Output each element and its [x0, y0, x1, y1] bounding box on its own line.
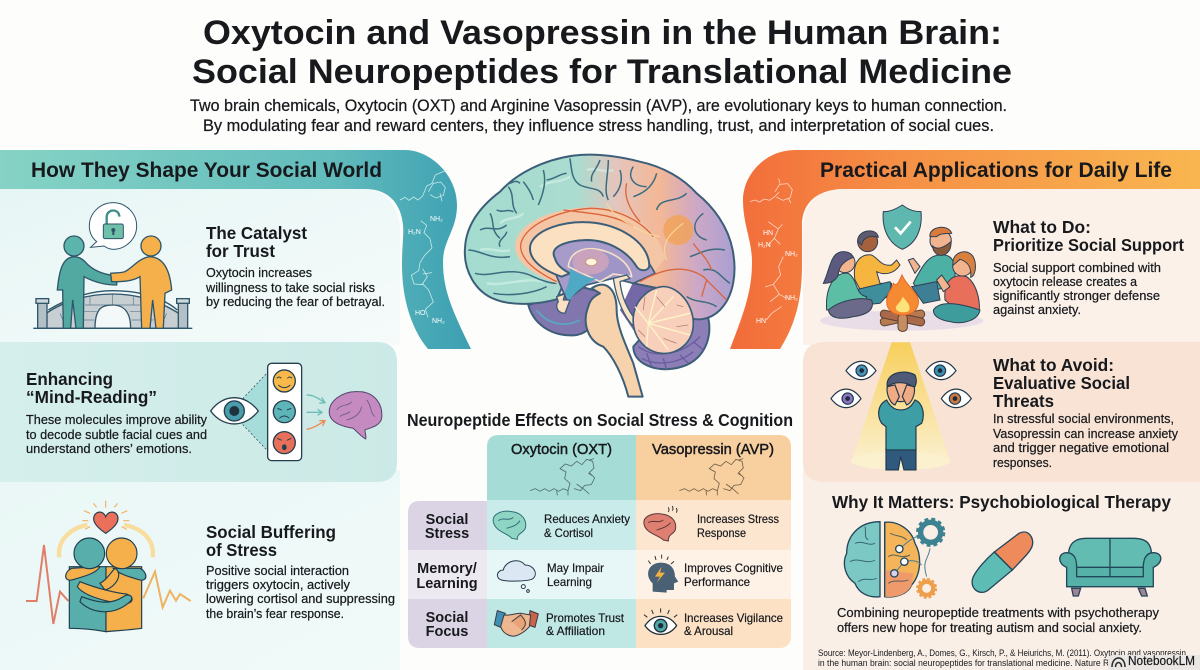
icon: handshake	[494, 611, 538, 636]
subtitle: By modulating fear and reward centers, they influence stress handling, trust, and interpretation of social cues.	[203, 116, 994, 135]
text block: social buffering: triggers oxytocin, actively	[206, 577, 350, 592]
row header column: Social	[426, 512, 468, 528]
text block: what to avoid: and trigger negative emotional	[993, 440, 1169, 455]
text block: what to avoid: Threats	[993, 391, 1054, 411]
panel: what to do	[803, 189, 1200, 345]
icon: capsule	[972, 532, 1033, 592]
panel: why it matters background	[803, 470, 1200, 670]
text block: social buffering: Positive social interaction	[206, 563, 349, 578]
text block: social buffering	[206, 522, 395, 621]
panel: left teal header ribbon: NH₂	[432, 318, 445, 325]
text block: social buffering: lowering cortisol and suppressing	[206, 591, 395, 606]
vasopressin column cells: Response	[697, 526, 746, 540]
text block: mind-reading: These molecules improve ability	[26, 412, 207, 427]
icon: eye reading facial expressions into brain	[211, 363, 382, 461]
heading: why it matters: Why It Matters: Psychobiological Therapy	[832, 492, 1171, 512]
source citation: in the human brain: social neuropeptides for translational medicine. Nature Re	[818, 658, 1114, 669]
text block: catalyst for trust: for Trust	[206, 241, 275, 261]
panel: left teal header ribbon	[0, 150, 471, 349]
panel: left teal header ribbon: H₂N	[408, 229, 421, 236]
oxytocin column cells	[487, 500, 636, 648]
text block: social buffering: of Stress	[206, 540, 277, 560]
row header column: Learning	[416, 576, 478, 592]
icon: calm brain	[493, 511, 526, 539]
icon: stressed person watched by eyes	[831, 342, 971, 470]
vasopressin column cells: Performance	[684, 575, 750, 589]
text block: mind-reading: to decode subtle facial cues and	[26, 427, 207, 442]
panel: what to avoid	[803, 342, 1200, 482]
text block: mind-reading: Enhancing	[26, 369, 113, 389]
text block: what to do: What to Do:	[993, 217, 1091, 237]
panel: right orange header ribbon: HN	[756, 318, 766, 325]
badge: notebooklm watermark	[1108, 654, 1200, 670]
text block: mind-reading: “Mind-Reading”	[26, 387, 157, 407]
row header column	[408, 501, 487, 648]
badge: notebooklm watermark: NotebookLM	[1128, 654, 1195, 668]
icon: friends around campfire with shield	[820, 205, 983, 331]
text block: catalyst for trust	[205, 223, 385, 309]
panel: left teal header ribbon: HO	[415, 310, 426, 317]
row header column: Social	[426, 610, 468, 626]
oxytocin column cells: Promotes Trust	[546, 611, 625, 625]
subtitle: Two brain chemicals, Oxytocin (OXT) and Arginine Vasopressin (AVP), are evolutionary keys to human connection.	[190, 96, 1007, 115]
text block: mind-reading: understand others’ emotions.	[26, 441, 192, 456]
panel: right orange header ribbon	[730, 150, 1200, 349]
oxytocin column cells: & Affiliation	[546, 624, 605, 638]
icon: handshake on bridge with unlocked speech bubble	[33, 203, 192, 328]
panel: right orange header ribbon: NH₂	[785, 251, 798, 258]
heading: how they shape: How They Shape Your Social World	[31, 159, 382, 182]
vasopressin column cells: Increases Stress	[697, 512, 779, 526]
comparison table	[408, 435, 791, 648]
panel: the catalyst for trust	[0, 189, 400, 345]
text block: catalyst for trust: by reducing the fear of betrayal.	[206, 294, 385, 309]
icon: brain halves with gears	[844, 520, 943, 597]
vasopressin column cells: Increases Vigilance	[684, 611, 783, 625]
icon: vigilant eye	[644, 608, 677, 634]
oxytocin column cells: & Cortisol	[544, 526, 593, 540]
title: Oxytocin and Vasopressin in the Human Brain:	[203, 14, 1002, 52]
text block: catalyst for trust: The Catalyst	[206, 223, 307, 243]
vasopressin column cells: & Arousal	[684, 624, 733, 638]
text block: what to do: Prioritize Social Support	[993, 235, 1184, 255]
panel: social buffering of stress	[0, 470, 400, 670]
column header: oxytocin: Oxytocin (OXT)	[511, 442, 612, 458]
text block: what to avoid: In stressful social environments,	[993, 411, 1174, 426]
panel: right orange header ribbon: H₂N	[758, 242, 771, 249]
icon: stressed brain	[644, 506, 677, 541]
title: Social Neuropeptides for Translational Medicine	[192, 53, 1012, 91]
column header: oxytocin	[487, 435, 636, 500]
panel: why it matters	[818, 492, 1200, 670]
text block: why it matters: Combining neuropeptide treatments with psychotherapy	[837, 605, 1159, 620]
text block: why it matters	[837, 605, 1159, 635]
text block: what to do: oxytocin release creates a	[993, 274, 1138, 289]
oxytocin column cells: Reduces Anxiety	[544, 512, 630, 526]
vasopressin column cells: Improves Cognitive	[684, 561, 783, 575]
text block: social buffering: the brain’s fear response.	[206, 606, 344, 621]
text block: what to do	[993, 217, 1184, 317]
text block: why it matters: offers new hope for treating autism and social anxiety.	[837, 620, 1142, 635]
text block: what to do: Social support combined with	[993, 260, 1161, 275]
panel: left teal header ribbon: NH₂	[430, 216, 443, 223]
column header: vasopressin	[636, 435, 791, 500]
icon: thought cloud	[497, 561, 535, 592]
text block: mind-reading	[26, 369, 207, 456]
column header: vasopressin: Vasopressin (AVP)	[652, 442, 774, 458]
icon: embracing figures with heart and heartbeat	[26, 501, 191, 632]
text block: what to avoid	[993, 355, 1178, 470]
text block: catalyst for trust: willingness to take social risks	[205, 280, 375, 295]
panel: right orange header ribbon: NH₂	[785, 295, 798, 302]
row header column: Memory/	[417, 561, 477, 577]
text block: what to do: against anxiety.	[993, 302, 1081, 317]
text block: catalyst for trust: Oxytocin increases	[206, 265, 312, 280]
title	[192, 14, 1012, 91]
icon: therapy couch	[1060, 538, 1161, 596]
heading: practical applications: Practical Applications for Daily Life	[820, 159, 1172, 182]
text block: what to avoid: Evaluative Social	[993, 373, 1130, 393]
text block: what to do: significantly stronger defense	[993, 288, 1160, 303]
vasopressin column cells	[636, 500, 791, 648]
text block: what to avoid: responses.	[993, 455, 1052, 470]
source citation	[818, 648, 1186, 669]
panel: enhancing mind-reading	[0, 342, 397, 482]
row header column: Focus	[426, 624, 468, 640]
row header column: Stress	[425, 526, 469, 542]
oxytocin column cells: Learning	[547, 575, 592, 589]
panel: right orange header ribbon: HN	[763, 230, 773, 237]
oxytocin column cells: May Impair	[547, 561, 604, 575]
text block: social buffering: Social Buffering	[206, 522, 336, 542]
central brain illustration	[465, 155, 735, 397]
subtitle	[190, 96, 1007, 135]
heading: table title: Neuropeptide Effects on Social Stress & Cognition	[407, 410, 793, 430]
text block: what to avoid: Vasopressin can increase anxiety	[993, 426, 1178, 441]
icon: head with lightning bolt	[648, 555, 678, 593]
text block: what to avoid: What to Avoid:	[993, 355, 1114, 375]
